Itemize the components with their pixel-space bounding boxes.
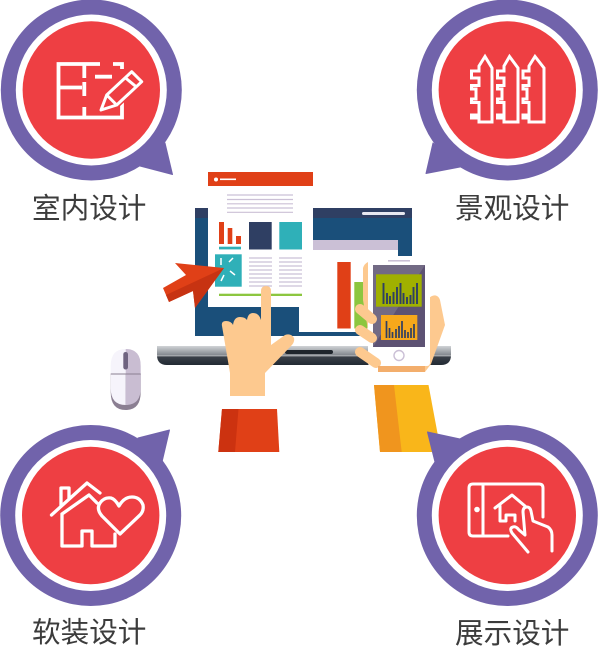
phone chart green <box>376 274 422 307</box>
yellow sleeve <box>374 385 441 452</box>
speech bubble <box>1 0 182 180</box>
red sleeve <box>218 409 279 452</box>
bubble: interior design <box>1 0 182 225</box>
document page <box>208 172 313 307</box>
icon: floor plan and pencil <box>58 64 142 118</box>
left hand pointing <box>222 286 294 396</box>
bubble: soft furnishing design <box>0 425 181 646</box>
fingers holding phone <box>360 309 376 363</box>
speech bubble <box>417 0 598 180</box>
phone body <box>368 260 430 366</box>
right hand back <box>363 262 445 372</box>
speech bubble <box>0 425 181 606</box>
icon: tablet, house and touch hand <box>469 484 552 552</box>
phone chart orange <box>381 315 417 340</box>
red arrow pointer <box>163 263 224 308</box>
label: 室内设计 <box>32 193 146 225</box>
icon: house with heart <box>52 483 143 546</box>
bubble: display design <box>417 425 598 646</box>
laptop base <box>157 346 451 365</box>
speech bubble <box>417 425 598 606</box>
central illustration: laptop and hands <box>157 172 451 452</box>
icon: fence <box>472 56 544 122</box>
laptop screen <box>195 208 412 336</box>
computer mouse <box>111 349 141 410</box>
bubble: landscape design <box>417 0 598 225</box>
smartphone in right hand <box>360 260 445 372</box>
label: 景观设计 <box>455 193 569 225</box>
